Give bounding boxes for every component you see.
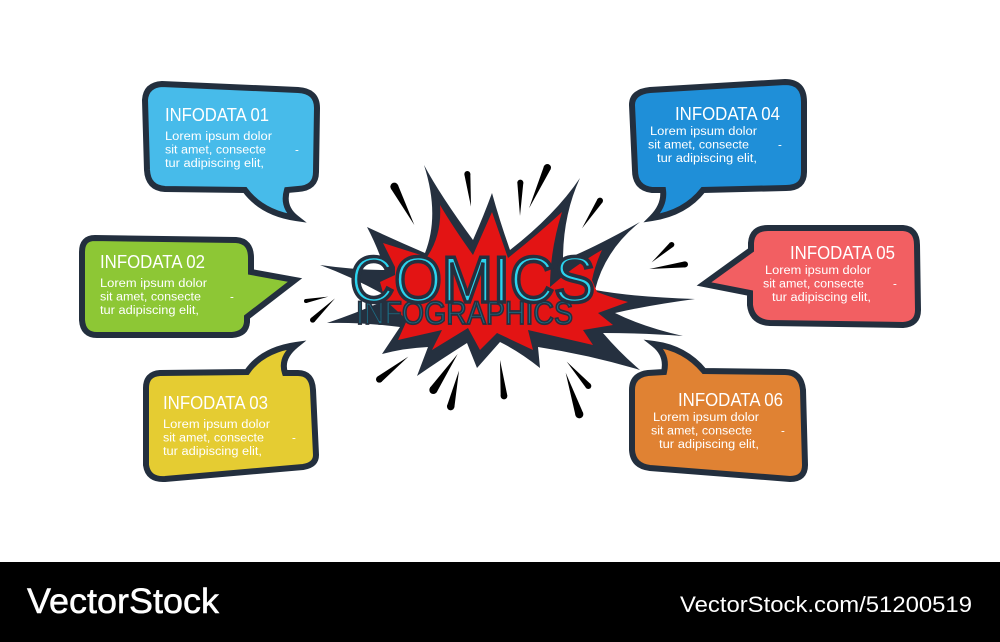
- heading 03: INFODATA 03: [163, 393, 268, 413]
- body text 06: tur adipiscing elit,: [659, 439, 759, 451]
- panel: infodata 03: [146, 345, 316, 479]
- footer image id: VectorStock.com/51200519: [680, 592, 972, 617]
- starburst explosion: [320, 165, 695, 376]
- speech bubble 01: [145, 84, 317, 218]
- subtitle INFOGRAPHICS: INFOGRAPHICS: [356, 295, 573, 331]
- heading 01: INFODATA 01: [165, 105, 269, 125]
- speech bubble 02: [82, 238, 295, 335]
- body text 03: tur adipiscing elit,: [163, 446, 262, 458]
- body text 05: [763, 265, 897, 304]
- body text 04: -: [778, 140, 782, 152]
- burst outline: [320, 165, 695, 376]
- body text 04: Lorem ipsum dolor: [650, 126, 757, 138]
- footer logo: VectorStock: [27, 582, 220, 621]
- body text 05: tur adipiscing elit,: [772, 292, 871, 304]
- body text 05: Lorem ipsum dolor: [765, 265, 871, 277]
- body text 06: sit amet, consecte: [651, 426, 752, 438]
- body text 05: -: [893, 278, 897, 290]
- panel: infodata 06: [632, 344, 805, 479]
- body text 04: tur adipiscing elit,: [657, 153, 757, 165]
- heading 06: INFODATA 06: [678, 390, 783, 410]
- body text 01: -: [295, 144, 299, 156]
- heading 05: INFODATA 05: [790, 243, 895, 263]
- body text 02: Lorem ipsum dolor: [100, 278, 207, 290]
- speech bubble 06: [632, 344, 805, 479]
- body text 03: Lorem ipsum dolor: [163, 419, 270, 431]
- panel: infodata 02: [82, 238, 295, 335]
- body text 04: sit amet, consecte: [648, 140, 749, 152]
- body text 01: sit amet, consecte: [165, 144, 266, 156]
- speech bubble 03: [146, 345, 316, 479]
- body text 01: tur adipiscing elit,: [165, 158, 264, 170]
- body text 06: Lorem ipsum dolor: [653, 412, 759, 424]
- heading COMICS: COMICS: [350, 243, 595, 316]
- body text 01: [165, 131, 299, 170]
- speech bubble 05: [704, 228, 918, 325]
- radiating action lines: [304, 164, 688, 418]
- title: COMICS INFOGRAPHICS: [350, 243, 595, 331]
- body text 06: [651, 412, 785, 451]
- body text 03: -: [292, 432, 296, 444]
- body text 03: sit amet, consecte: [163, 432, 264, 444]
- panel: infodata 04: [632, 82, 804, 218]
- heading 04: INFODATA 04: [675, 104, 780, 124]
- body text 05: sit amet, consecte: [763, 278, 864, 290]
- body text 04: [648, 126, 782, 165]
- body text 03: [163, 419, 296, 458]
- heading 02: INFODATA 02: [100, 252, 205, 272]
- body text 02: [100, 278, 234, 317]
- burst red fill: [380, 205, 628, 350]
- body text 02: -: [230, 292, 234, 304]
- body text 01: Lorem ipsum dolor: [165, 131, 272, 143]
- body text 02: tur adipiscing elit,: [100, 305, 199, 317]
- body text 02: sit amet, consecte: [100, 292, 201, 304]
- footer bar: [0, 562, 1000, 642]
- speech bubble 04: [632, 82, 804, 218]
- body text 06: -: [781, 426, 785, 438]
- panel: infodata 05: [704, 228, 918, 325]
- panel: infodata 01: [145, 84, 317, 218]
